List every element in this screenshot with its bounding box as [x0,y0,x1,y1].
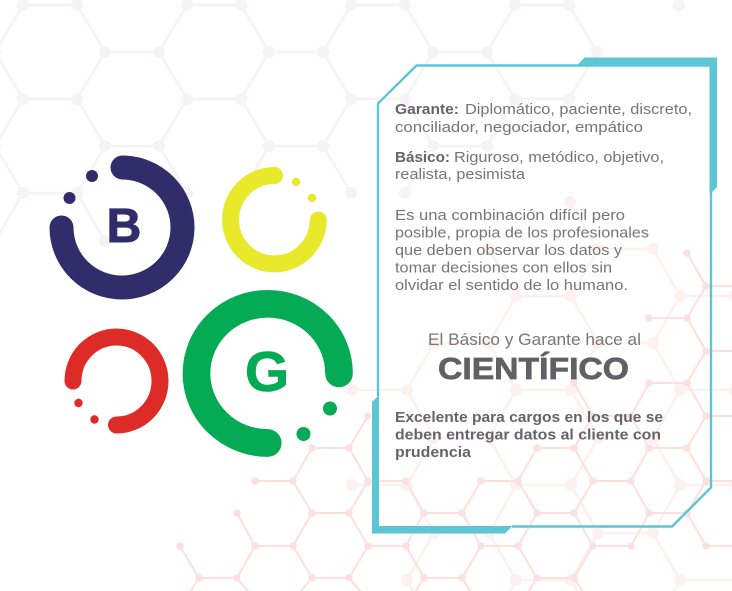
text: Garante: conciliador, negociador, empático [395,120,643,136]
panel frame [372,58,717,534]
text: recomendación: deben entregar datos al cliente con [395,428,661,444]
text: descripción: olvidar el sentido de lo humano. [395,278,628,294]
text: Básico: realista, pesimista [395,167,526,183]
subheading: El Básico y Garante hace al [428,330,641,349]
icon: yellow ring [231,175,318,264]
text: descripción [395,208,649,294]
icon: navy ring B [62,168,182,287]
text: Básico [395,150,664,183]
heading: CIENTÍFICO: CIENTÍFICO [438,351,629,386]
text: descripción: tomar decisiones con ellos sin [395,260,612,276]
text: descripción: posible, propia de los profesionales [395,226,649,242]
text: descripción: que deben observar los datos y [395,243,623,259]
text: recomendación: prudencia [395,445,472,461]
panel: perfil científico [372,58,717,534]
icon: red ring [73,337,160,425]
text: Garante: Diplomático, paciente, discreto, [465,102,692,118]
icon: navy ring B: B [107,200,141,253]
text: Garante [395,102,692,136]
text: descripción: Es una combinación difícil pero [395,208,625,224]
text: recomendación [395,410,663,461]
icon: green ring G [197,304,339,443]
text: recomendación: Excelente para cargos en los que se [395,410,663,426]
text: Garante: Garante: [395,102,459,118]
text: Básico: Riguroso, metódico, objetivo, [454,150,664,166]
icon: green ring G: G [245,340,289,404]
text: Básico: Básico: [395,150,450,166]
